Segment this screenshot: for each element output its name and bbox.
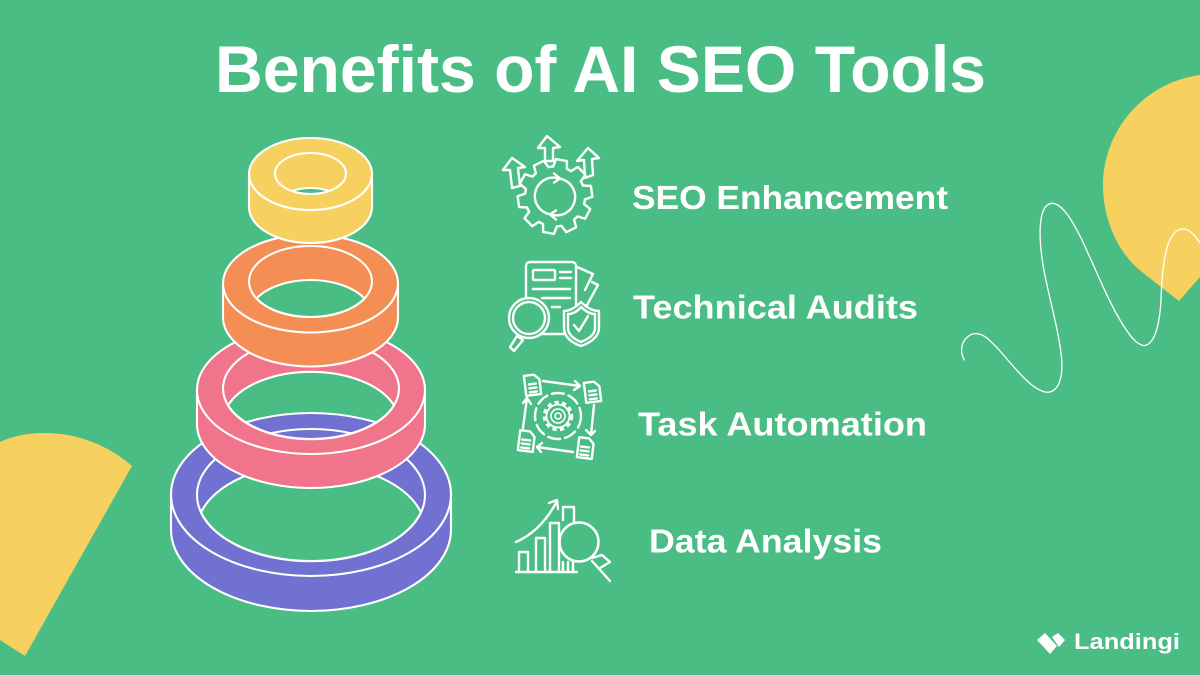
label: SEO Enhancement: SEO Enhancement bbox=[632, 179, 948, 216]
ring: pink bbox=[197, 326, 425, 488]
logo: Landingi bbox=[1037, 629, 1180, 654]
label: Data Analysis: Data Analysis bbox=[649, 522, 882, 560]
label: Technical Audits: Technical Audits bbox=[633, 288, 918, 326]
label: Task Automation: Task Automation bbox=[638, 406, 927, 442]
logo wordmark: Landingi bbox=[1074, 629, 1180, 654]
stacked rings illustration bbox=[171, 138, 451, 611]
ring: yellow bbox=[249, 138, 372, 243]
title: Benefits of AI SEO Tools bbox=[215, 33, 986, 106]
icon: bar chart with magnifier bbox=[516, 500, 610, 581]
ring: purple bbox=[171, 413, 451, 611]
icon: gear with documents in a cycle bbox=[518, 374, 601, 459]
decorative yellow shape: bottom left bbox=[0, 433, 132, 656]
icon: gear with arrows bbox=[503, 136, 599, 240]
ring: orange bbox=[223, 234, 398, 366]
logo mark bbox=[1037, 633, 1065, 654]
decorative squiggle line bbox=[962, 203, 1200, 392]
icon: document audit with magnifier and shield bbox=[509, 262, 599, 351]
decorative yellow shape: top right bbox=[1103, 75, 1200, 301]
